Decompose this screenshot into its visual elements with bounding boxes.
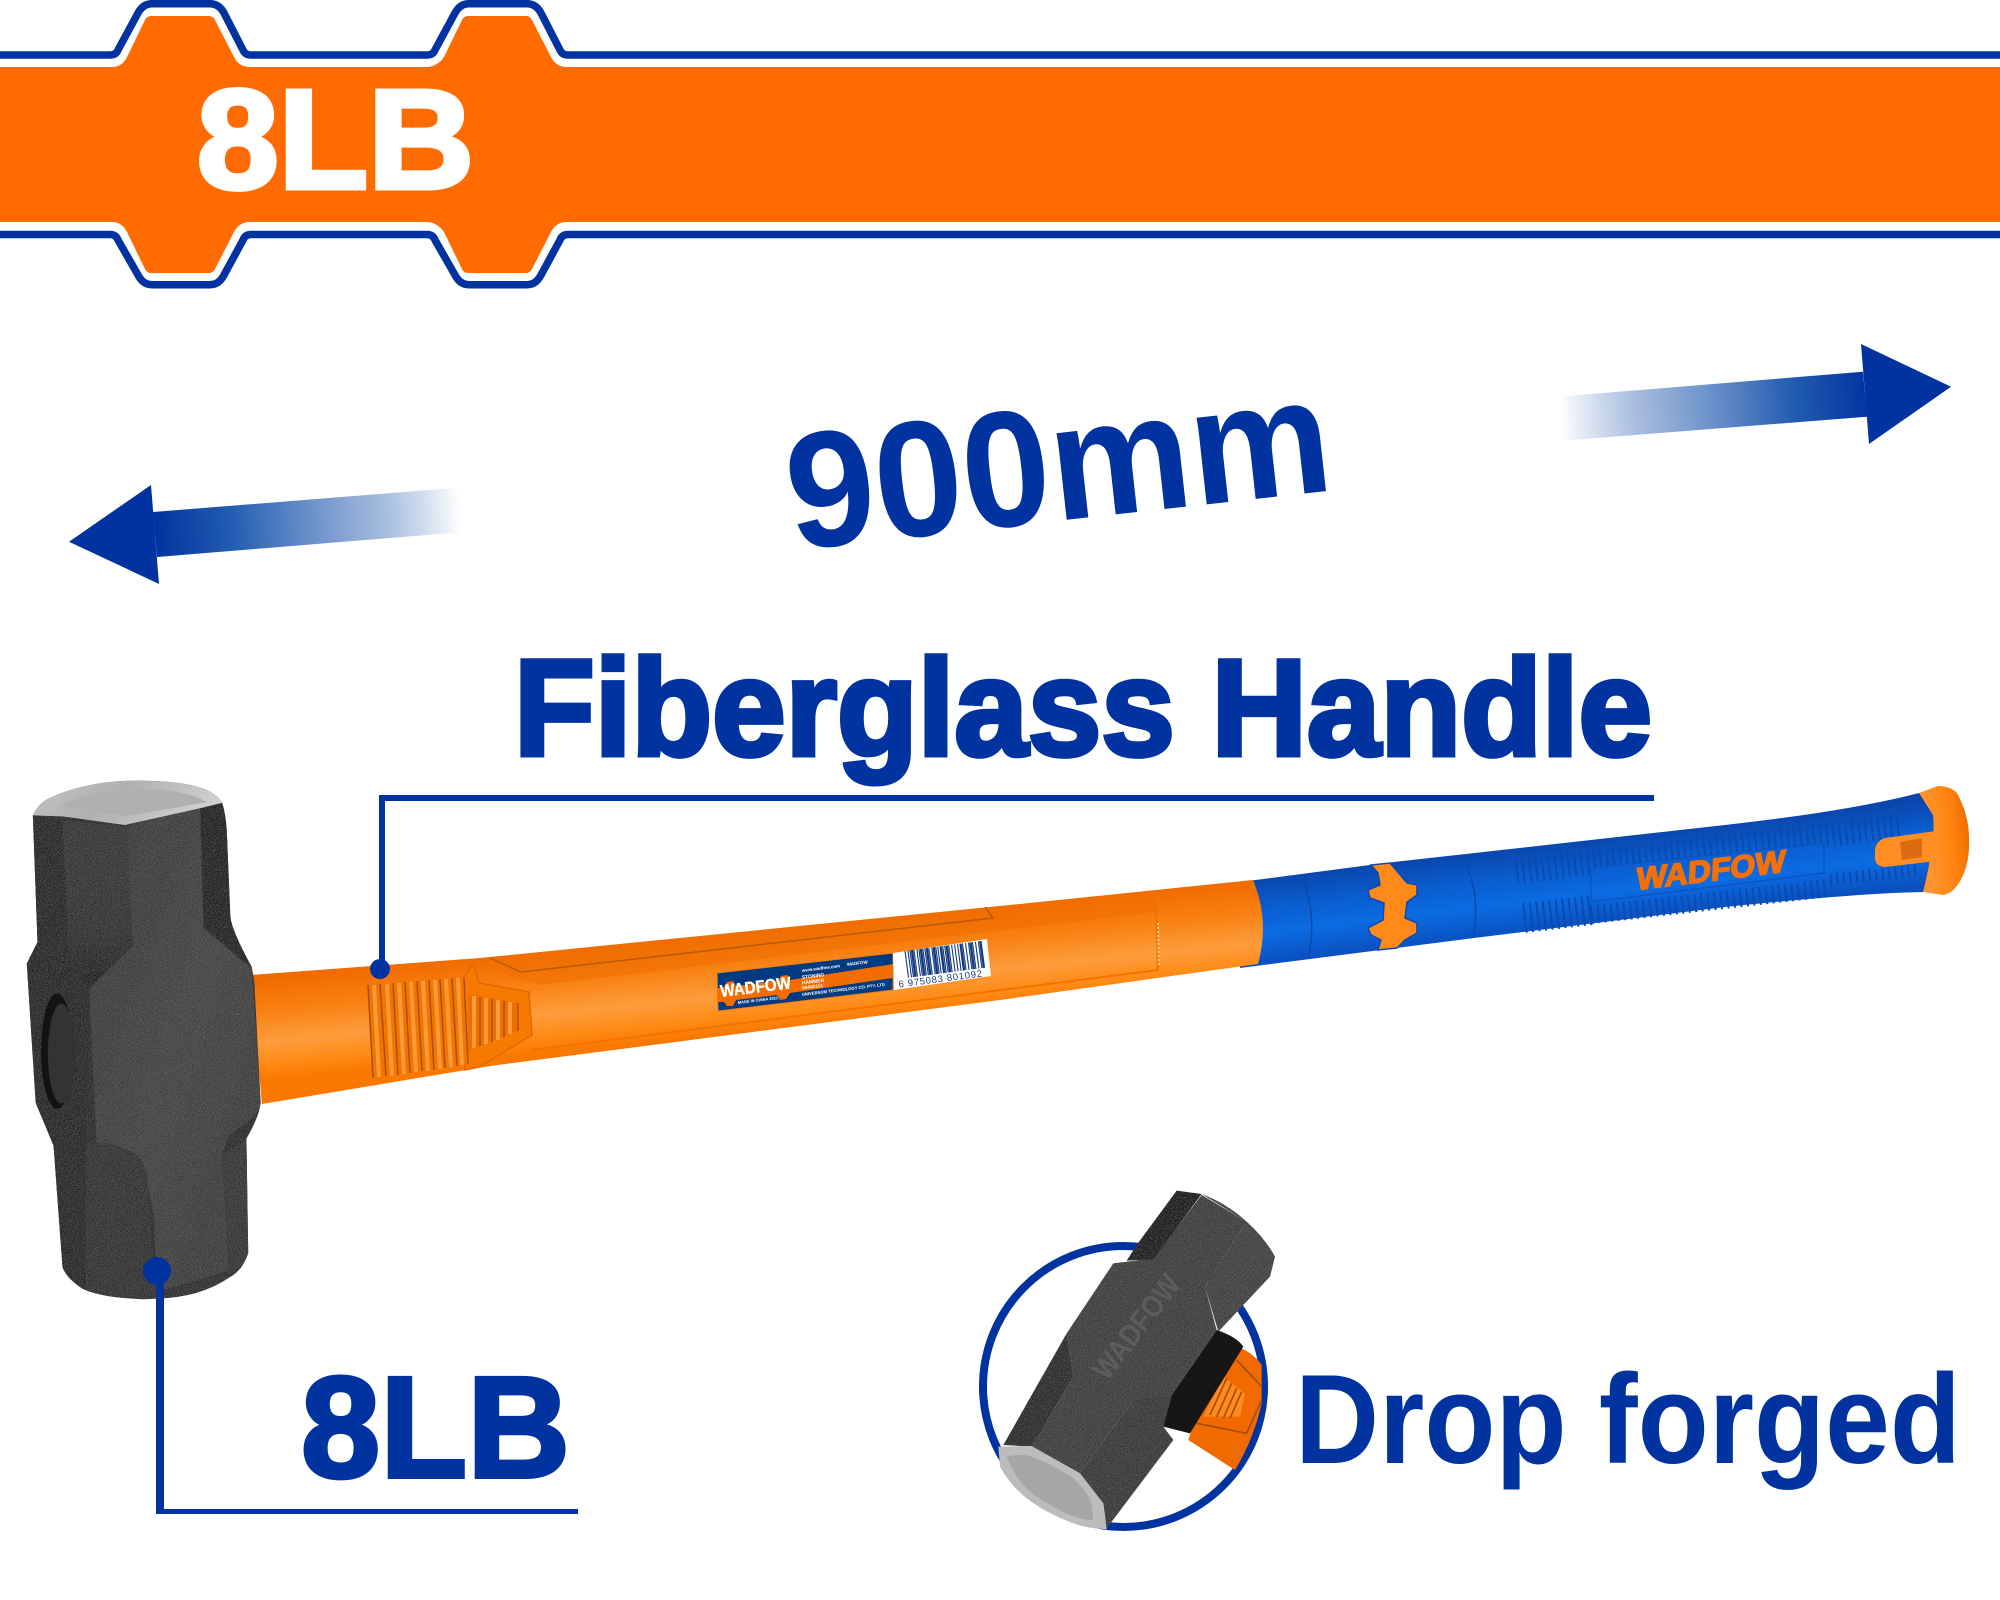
hammer head <box>27 781 261 1299</box>
head striking face <box>33 781 222 825</box>
inset orange handle <box>1188 1348 1262 1470</box>
product label <box>717 939 991 1011</box>
inset circle <box>983 1246 1264 1527</box>
label small text: WHM2113 <box>802 983 823 990</box>
label logo: WADFOW <box>719 973 793 1001</box>
heading: Fiberglass Handle: Fiberglass Handle <box>514 632 1652 785</box>
handle: blue grip <box>1240 793 1936 968</box>
top banner <box>0 4 2000 285</box>
banner top blue outline <box>0 4 2000 55</box>
handle: neck ribs <box>368 964 532 1078</box>
barcode: 6 975083 801092 <box>898 969 983 990</box>
drop forged inset <box>983 1191 1275 1529</box>
length text: 900mm <box>777 342 1340 585</box>
banner bottom blue outline <box>0 234 2000 285</box>
label small text <box>738 959 885 1005</box>
length dimension <box>69 342 1951 585</box>
label small text: MADE IN CHINA 2021 <box>738 995 779 1005</box>
head silhouette and facets <box>27 781 261 1299</box>
drop forged text: Drop forged <box>1295 1348 1961 1490</box>
callout: handle leader line <box>370 798 1654 979</box>
label small text: UNIVERSOM TECHNOLOGY CO. PTY. LTD <box>802 982 885 997</box>
banner weight text: 8LB <box>197 60 474 218</box>
head eye hole <box>41 993 75 1109</box>
weight text: 8LB <box>301 1347 570 1508</box>
handle: end cap <box>1875 786 1969 895</box>
inset collar <box>1163 1330 1243 1433</box>
inset striking face <box>998 1446 1107 1529</box>
inset hammer logo: WADFOW <box>1086 1268 1188 1386</box>
label small text: WADFOW <box>847 959 869 967</box>
label small text: HAMMER <box>802 978 825 986</box>
right arrow <box>1558 344 1951 444</box>
inset head <box>1003 1191 1275 1528</box>
label small text: STONING <box>802 972 825 981</box>
handle: logo on grip: WADFOW <box>1636 843 1787 897</box>
inset hammer <box>998 1191 1275 1529</box>
sledgehammer <box>27 781 1969 1299</box>
handle: orange collar clip <box>1368 863 1417 950</box>
handle: orange shaft <box>250 880 1263 1104</box>
barcode <box>893 939 991 990</box>
banner orange band <box>0 16 2000 273</box>
label orange band <box>717 964 893 1006</box>
left arrow <box>69 485 463 584</box>
callout: weight leader line <box>143 1257 578 1512</box>
label small text: www.wadfow.com <box>801 963 840 973</box>
